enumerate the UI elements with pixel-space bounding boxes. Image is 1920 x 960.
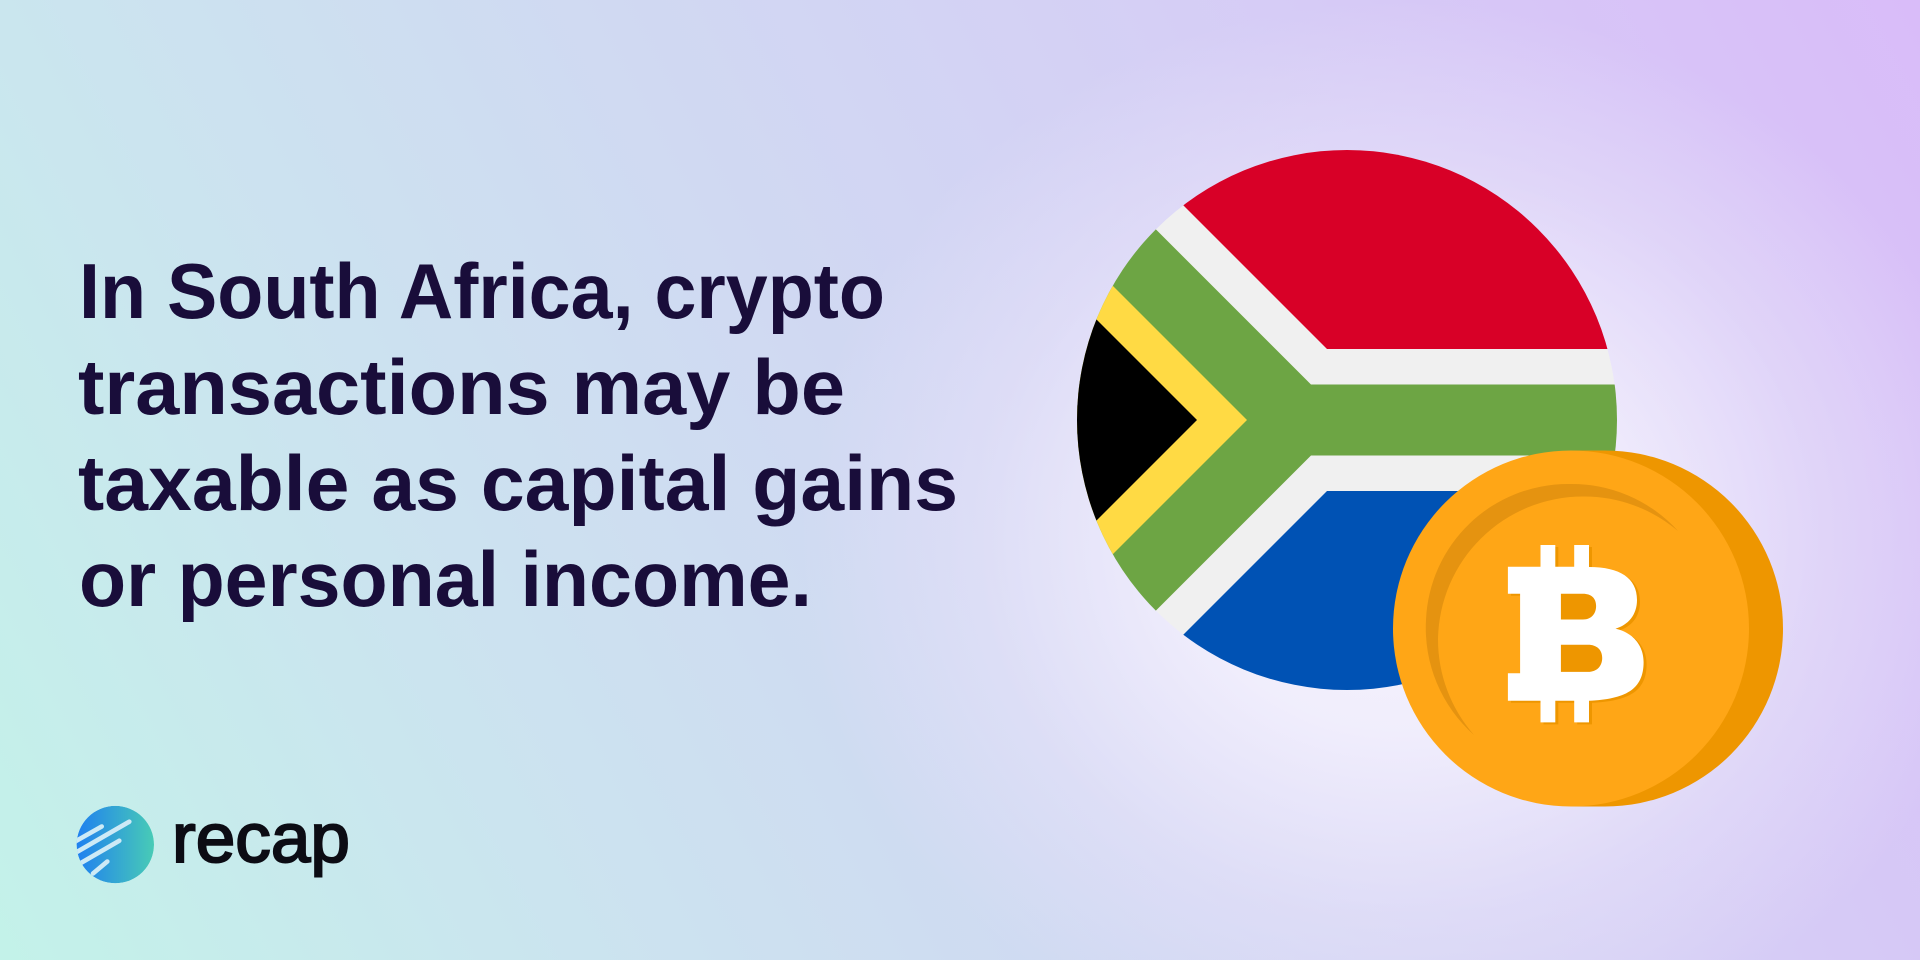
infographic canvas	[76, 150, 1783, 884]
heading: transactions may be	[78, 343, 845, 431]
icon: South Africa flag	[1077, 150, 1617, 690]
heading	[78, 247, 958, 623]
heading: or personal income.	[79, 535, 812, 623]
logo wordmark: recap	[172, 799, 350, 877]
heading: taxable as capital gains	[78, 439, 958, 527]
icon: bitcoin coin	[1393, 450, 1783, 806]
logo: recap	[76, 799, 350, 883]
heading: In South Africa, crypto	[79, 247, 885, 335]
logo mark	[76, 806, 154, 883]
